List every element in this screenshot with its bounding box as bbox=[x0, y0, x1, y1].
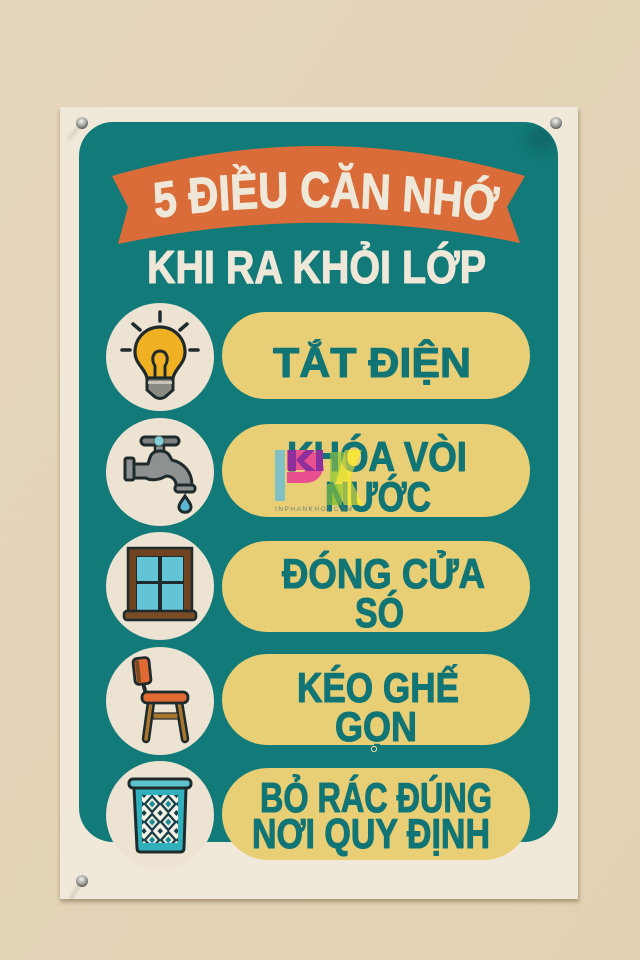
pin: top left bbox=[68, 117, 88, 140]
teal panel bbox=[79, 122, 558, 842]
pill: TẮT ĐIỆN: TẮT ĐIỆN bbox=[273, 338, 471, 386]
icon: water tap bbox=[106, 418, 214, 526]
title text: 5 ĐIỀU CĂN NHỚ bbox=[154, 162, 500, 220]
row 5: put trash in the right place bbox=[106, 761, 530, 869]
pill: BỎ RÁC ĐÚNG NƠI QUY ĐỊNH: NƠI QUY ĐỊNH bbox=[252, 810, 490, 857]
icon: chair bbox=[106, 647, 214, 755]
pill: KÉO GHẾ GỌN bbox=[222, 654, 530, 752]
poster board bbox=[60, 107, 579, 902]
pin shadow on panel bbox=[527, 127, 555, 151]
subtitle: KHI RA KHỎI LỚP bbox=[147, 241, 486, 293]
pill: BỎ RÁC ĐÚNG NƠI QUY ĐỊNH bbox=[222, 768, 530, 860]
watermark: INPHANKHOI logo bbox=[275, 450, 363, 513]
pill: BỎ RÁC ĐÚNG NƠI QUY ĐỊNH: BỎ RÁC ĐÚNG bbox=[260, 773, 492, 821]
icon: window bbox=[106, 532, 214, 640]
row 3: close the window bbox=[106, 532, 530, 640]
pill: ĐÓNG CỬA SỔ bbox=[222, 541, 530, 636]
pill: KÉO GHẾ GỌN: KÉO GHẾ bbox=[297, 664, 459, 711]
pill: KHÓA VÒI NƯỚC: KHÓA VÒI bbox=[287, 432, 467, 480]
row 1: turn off lights bbox=[106, 303, 530, 411]
pill: TẮT ĐIỆN bbox=[222, 312, 530, 399]
watermark: INPHANKHOI logo: INPHANKHOI.COM bbox=[275, 506, 353, 513]
row 4: tuck in the chair bbox=[106, 647, 530, 755]
pill: ĐÓNG CỬA SỔ: SÓ bbox=[355, 588, 404, 636]
title banner bbox=[112, 146, 525, 244]
pin: bottom left bbox=[70, 875, 88, 900]
icon: light bulb bbox=[106, 303, 214, 411]
ribbon shape bbox=[112, 146, 525, 244]
pill: KHÓA VÒI NƯỚC: NƯỚC bbox=[325, 472, 431, 520]
icon: waste basket bbox=[106, 761, 214, 869]
pill: KÉO GHẾ GỌN: GỌN bbox=[335, 703, 417, 750]
row 2: close the tap bbox=[106, 418, 530, 526]
pill: ĐÓNG CỬA SỔ: ĐÓNG CỬA bbox=[282, 549, 485, 597]
pill: KHÓA VÒI NƯỚC bbox=[222, 424, 530, 520]
pin: top right bbox=[550, 117, 562, 129]
